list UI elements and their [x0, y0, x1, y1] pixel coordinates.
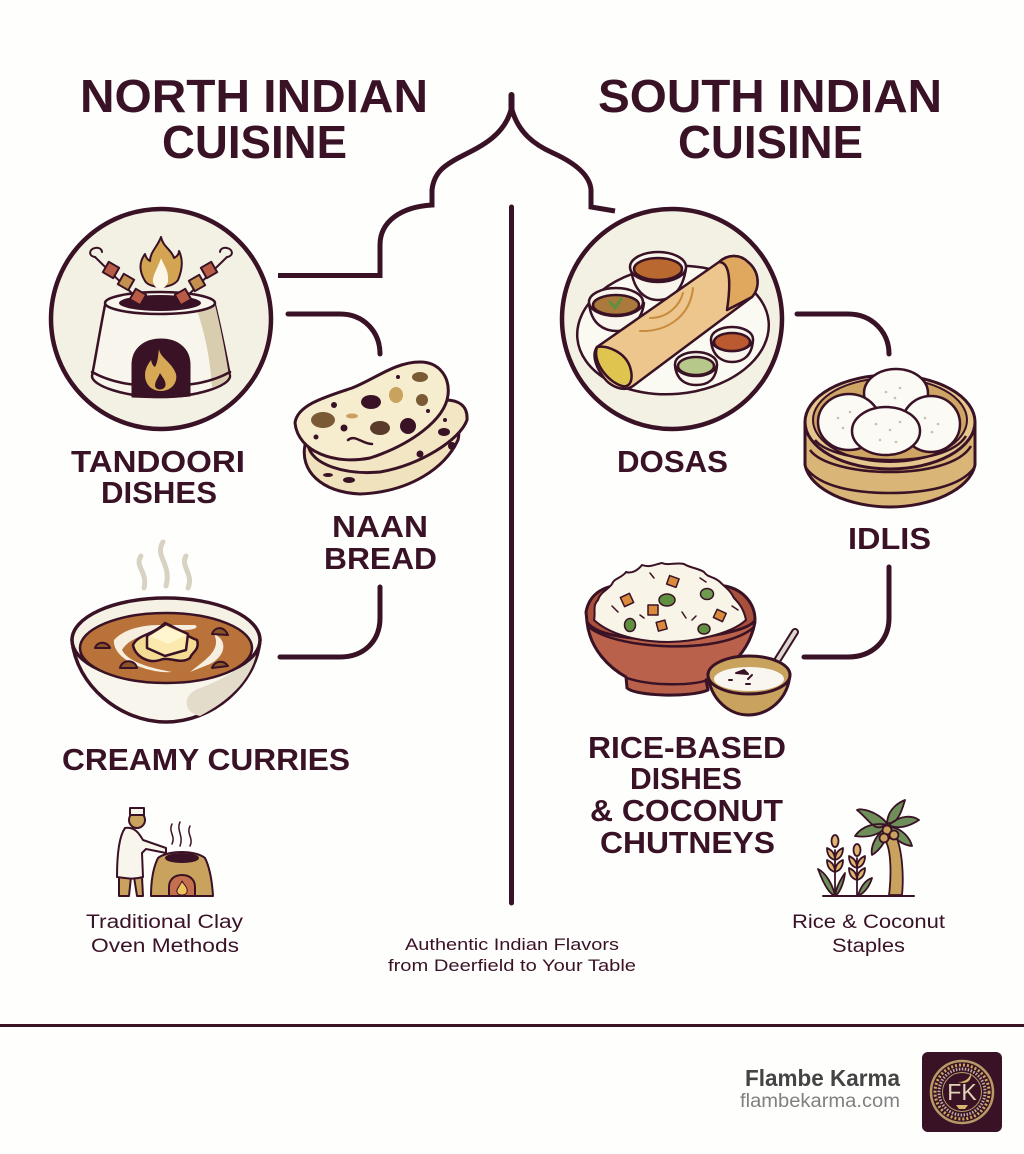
label: Rice-Based Dishes and Coconut Chutneys: RICE-BASED [588, 730, 786, 765]
melted butter [133, 623, 198, 661]
heading: South Indian Cuisine [598, 70, 942, 168]
caption: Authentic Indian Flavors tagline: from Deerfield to Your Table [388, 956, 636, 975]
label: Rice-Based Dishes and Coconut Chutneys [588, 730, 786, 860]
heading: North Indian Cuisine [80, 70, 428, 168]
heading: South Indian Cuisine: CUISINE [678, 116, 863, 168]
curry chunks [95, 628, 228, 668]
rice stalk left [834, 850, 836, 896]
skewers [95, 257, 227, 306]
caption: Authentic Indian Flavors tagline: Authentic Indian Flavors [405, 935, 619, 954]
bowl body [72, 640, 260, 722]
sauce bowl right [711, 327, 753, 362]
caption: Traditional Clay Oven Methods [86, 912, 244, 957]
rice stalk right [856, 858, 858, 896]
sauce bowl left [589, 288, 644, 331]
sauce bowl top [630, 252, 686, 300]
chutney bowl [708, 674, 790, 715]
oven body [92, 305, 230, 397]
sauce bowl bottom [675, 352, 717, 385]
footer brand text [740, 1065, 900, 1112]
dome arch divider outline [278, 95, 615, 276]
icon: tandoor oven in circle [51, 209, 271, 429]
chef legs [119, 877, 143, 896]
connector: idlis to rice [804, 567, 889, 657]
heading: North Indian Cuisine: NORTH INDIAN [80, 70, 428, 122]
icon: curry bowl with steam [72, 542, 260, 722]
palm fronds [855, 800, 919, 855]
label: Rice-Based Dishes and Coconut Chutneys: DISHES [630, 761, 742, 796]
idli dimples [837, 387, 939, 443]
caption: Rice and Coconut Staples: Rice & Coconut [792, 912, 946, 933]
icon: rice bowl with coconut chutney [586, 563, 795, 715]
coconuts [882, 826, 892, 834]
rice mound [594, 563, 746, 642]
caption: Traditional Clay Oven Methods: Traditional Clay [86, 912, 244, 933]
footer brand text: flambekarma.com [740, 1091, 900, 1112]
curry surface [80, 613, 252, 683]
caption: Rice and Coconut Staples [792, 912, 946, 957]
label: Creamy Curries: CREAMY CURRIES [62, 742, 350, 777]
label: Dosas: DOSAS [617, 444, 728, 479]
label: Naan Bread: NAAN [332, 509, 428, 544]
label: Idlis: IDLIS [848, 521, 931, 556]
dosa roll [595, 256, 758, 389]
connector: naan to curries [280, 587, 380, 657]
clay oven [151, 852, 213, 896]
icon: Flambe Karma logo: FK [947, 1079, 977, 1105]
footer divider [0, 1024, 1024, 1027]
steam [171, 822, 191, 846]
icon: Flambe Karma logo [922, 1052, 1002, 1132]
palm trunk [885, 836, 903, 895]
connector: tandoori to naan [288, 314, 380, 354]
ground line [823, 895, 914, 897]
icon: idlis in bamboo steamer [805, 369, 975, 507]
bowl [587, 622, 755, 695]
top flame [140, 237, 182, 287]
rice vegetables [612, 573, 738, 634]
connector: dosas to idlis [797, 314, 889, 354]
icon: naan bread stack [295, 362, 467, 494]
oven door [132, 339, 190, 398]
icon: rice stalks and coconut palm [818, 800, 919, 896]
door flame [145, 349, 176, 391]
footer brand text: Flambe Karma [745, 1065, 900, 1091]
icon: dosa plate in circle [562, 209, 782, 429]
label: Tandoori Dishes [71, 444, 245, 510]
chef body [117, 828, 166, 879]
dosa filling [596, 347, 632, 386]
bowl rim [72, 598, 260, 682]
steamer base [805, 422, 975, 507]
steamer rim [805, 375, 975, 469]
butter cube [147, 624, 188, 656]
label: Rice-Based Dishes and Coconut Chutneys: & COCONUT [590, 793, 783, 828]
spoon [770, 632, 795, 672]
label: Tandoori Dishes: TANDOORI [71, 444, 245, 479]
heading: South Indian Cuisine: SOUTH INDIAN [598, 70, 942, 122]
steam [139, 542, 190, 588]
plate [572, 258, 774, 402]
icon: chef at clay oven [117, 808, 213, 896]
center divider line [509, 207, 514, 903]
cream swirl [114, 625, 223, 672]
label: Naan Bread: BREAD [324, 541, 437, 576]
caption: Authentic Indian Flavors tagline [388, 935, 636, 975]
caption: Traditional Clay Oven Methods: Oven Methods [91, 936, 239, 957]
naan char marks [311, 372, 456, 483]
label: Tandoori Dishes: DISHES [101, 475, 217, 510]
label: Naan Bread [324, 509, 437, 576]
top naan [295, 362, 448, 460]
idlis [818, 369, 960, 455]
heading: North Indian Cuisine: CUISINE [162, 116, 347, 168]
chef head [129, 812, 145, 828]
label: Rice-Based Dishes and Coconut Chutneys: CHUTNEYS [600, 825, 775, 860]
caption: Rice and Coconut Staples: Staples [832, 936, 905, 957]
